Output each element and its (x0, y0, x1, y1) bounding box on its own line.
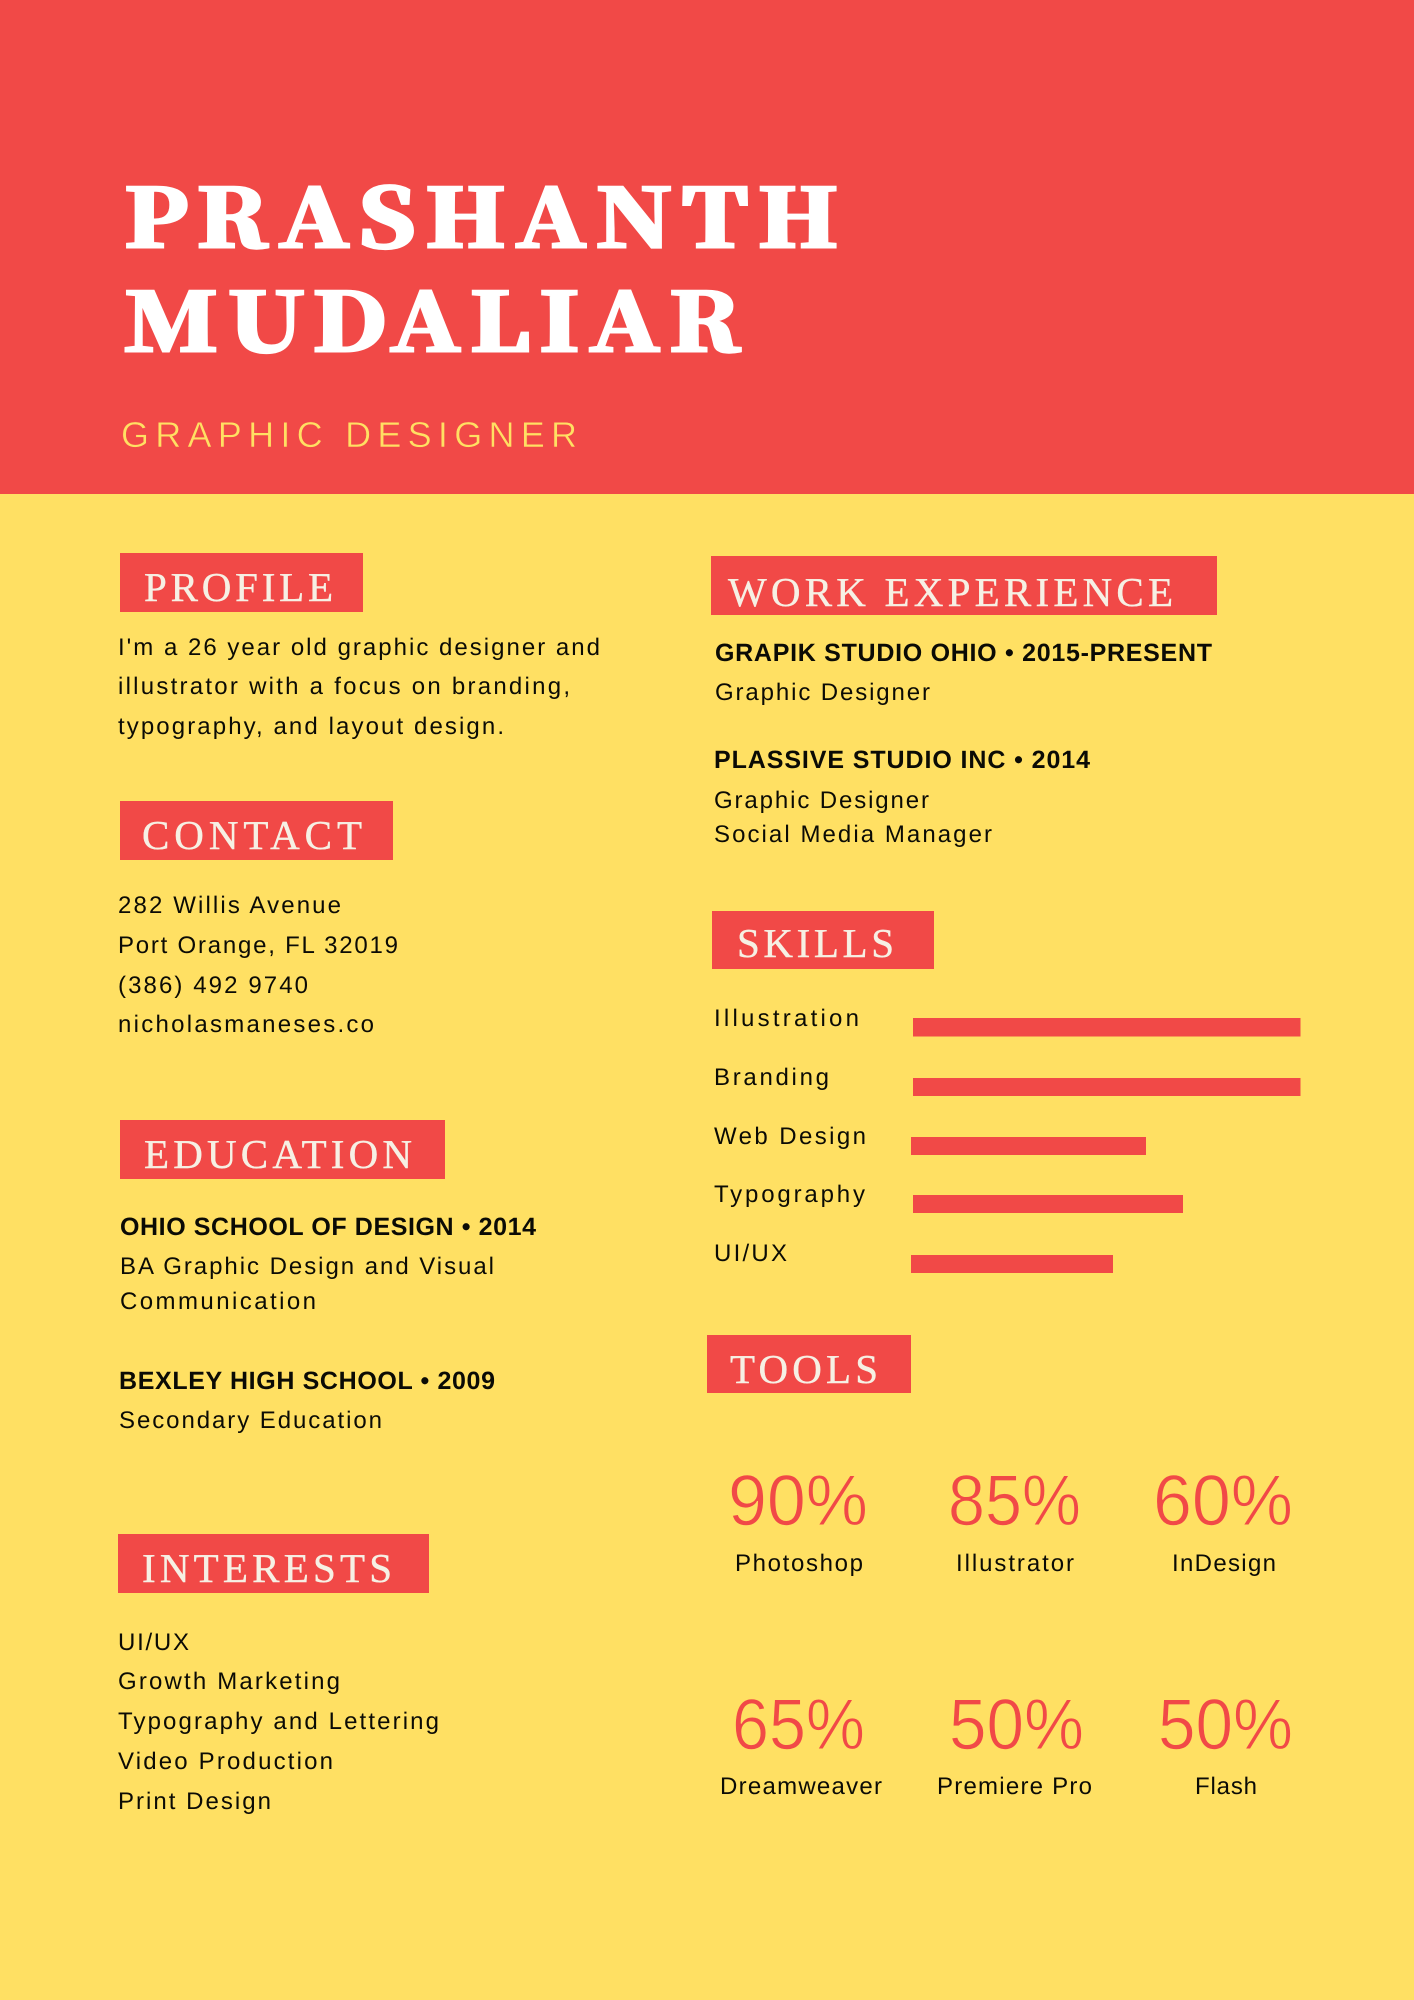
tool stat: Flash (1158, 1685, 1293, 1800)
education entry: Ohio School of Design: Communication (120, 1288, 316, 1315)
panel: tools (707, 1335, 1293, 1800)
title: first name: PRASHANTH (124, 155, 848, 270)
subtitle: GRAPHIC DESIGNER (121, 414, 577, 455)
panel: interests (118, 1534, 439, 1815)
heading: profile (120, 553, 363, 612)
interests list: UI/UX (118, 1629, 189, 1656)
heading: education (120, 1120, 445, 1179)
tool stat: Illustrator: 85% (948, 1461, 1081, 1541)
profile text: illustrator with a focus on branding, (118, 673, 570, 700)
skill: UI/UX (714, 1240, 1113, 1273)
interests list: Growth Marketing (118, 1668, 340, 1695)
heading: interests: INTERESTS (142, 1545, 392, 1591)
bar chart: skills (714, 1005, 1300, 1273)
interests list: Print Design (118, 1788, 271, 1815)
heading: contact: CONTACT (142, 812, 362, 858)
interests list: Typography and Lettering (118, 1708, 439, 1735)
contact details: Port Orange, FL 32019 (118, 932, 398, 959)
skill: Web Design (714, 1123, 1146, 1155)
contact details (118, 892, 398, 1038)
education entry: Ohio School of Design (120, 1213, 536, 1315)
panel: profile (118, 553, 600, 740)
header banner (0, 0, 1414, 494)
heading: interests (118, 1534, 429, 1593)
heading: profile: PROFILE (144, 564, 333, 610)
title: last name: MUDALIAR (124, 259, 750, 374)
tool stat: Photoshop: Photoshop (735, 1550, 863, 1577)
tool stat: Flash: Flash (1195, 1773, 1257, 1800)
heading: contact (120, 801, 393, 860)
tool stat: Illustrator: Illustrator (956, 1550, 1074, 1577)
contact details: (386) 492 9740 (118, 972, 308, 999)
education entry: Ohio School of Design: OHIO SCHOOL OF DESIGN • 2014 (120, 1213, 536, 1241)
tool stat: InDesign: 60% (1153, 1461, 1293, 1541)
heading: tools: TOOLS (730, 1346, 878, 1392)
job: Plassive Studio Inc: Social Media Manager (714, 821, 992, 848)
interests list (118, 1629, 439, 1815)
skill: Typography: Typography (714, 1181, 865, 1208)
skill: Branding (714, 1064, 1300, 1096)
tool stat: Premiere Pro: Premiere Pro (937, 1773, 1092, 1800)
job: Grapik Studio Ohio (715, 639, 1212, 706)
skill: Web Design: Web Design (714, 1123, 866, 1150)
skill: UI/UX: UI/UX (714, 1240, 787, 1267)
skill: Branding: Branding (714, 1064, 829, 1091)
contact details: 282 Willis Avenue (118, 892, 341, 919)
education entry: Ohio School of Design: BA Graphic Design and Visual (120, 1253, 494, 1280)
panel: skills (712, 911, 1300, 1273)
job: Plassive Studio Inc (714, 746, 1090, 848)
tool stat: Dreamweaver: Dreamweaver (720, 1773, 882, 1800)
interests list: Video Production (118, 1748, 333, 1775)
tool stat: Photoshop (728, 1461, 868, 1577)
panel: education (119, 1120, 536, 1434)
tool stat: Illustrator (948, 1461, 1081, 1577)
tool stat: Flash: 50% (1158, 1685, 1293, 1765)
profile text (118, 634, 600, 740)
panel: work experience (711, 556, 1217, 848)
job: Grapik Studio Ohio: Graphic Designer (715, 679, 930, 706)
education entry: Bexley High School: BEXLEY HIGH SCHOOL • 2009 (119, 1367, 495, 1395)
tool stat: Premiere Pro: 50% (949, 1685, 1084, 1765)
panel: contact (118, 801, 398, 1038)
skill: Illustration: Illustration (714, 1005, 859, 1032)
heading: work experience (711, 556, 1217, 615)
profile text: I'm a 26 year old graphic designer and (118, 634, 600, 661)
job: Plassive Studio Inc: PLASSIVE STUDIO INC • 2014 (714, 746, 1090, 774)
job: Plassive Studio Inc: Graphic Designer (714, 787, 929, 814)
heading: skills: SKILLS (737, 920, 894, 966)
heading: tools (707, 1335, 911, 1393)
heading: education: EDUCATION (144, 1131, 412, 1177)
tool stat: Dreamweaver (720, 1685, 882, 1800)
skill: Typography (714, 1181, 1183, 1213)
skill: Illustration (714, 1005, 1300, 1036)
education entry: Bexley High School: Secondary Education (119, 1407, 382, 1434)
job: Grapik Studio Ohio: GRAPIK STUDIO OHIO • 2015-PRESENT (715, 639, 1212, 667)
heading: work experience: WORK EXPERIENCE (728, 569, 1173, 615)
tool stat: Premiere Pro (937, 1685, 1092, 1800)
contact details: nicholasmaneses.co (118, 1011, 374, 1038)
tool stat: InDesign (1153, 1461, 1293, 1577)
tool stat: Dreamweaver: 65% (732, 1685, 865, 1765)
education entry: Bexley High School (119, 1367, 495, 1434)
heading: skills (712, 911, 934, 969)
profile text: typography, and layout design. (118, 713, 504, 740)
tool stat: Photoshop: 90% (728, 1461, 868, 1541)
tool stat: InDesign: InDesign (1172, 1550, 1276, 1577)
